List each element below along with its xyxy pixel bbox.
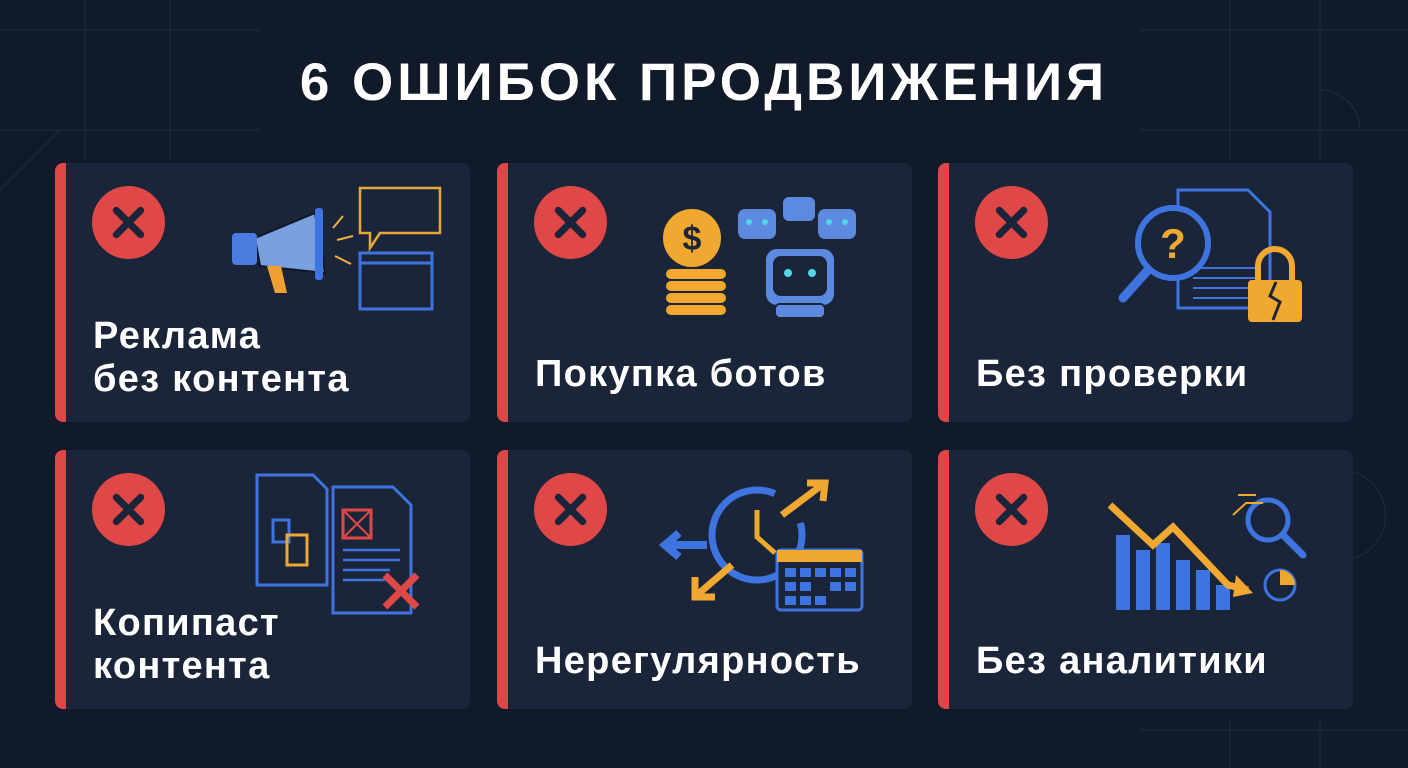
- icon: megaphone: [232, 186, 442, 310]
- text: Нерегулярность: [535, 640, 861, 682]
- panel: bots: [497, 163, 912, 422]
- text: [93, 602, 280, 687]
- icon: error x: [975, 186, 1048, 259]
- icon: clock arrows calendar: [659, 480, 864, 612]
- text: без контента: [93, 358, 350, 400]
- icon: coins and robots: $: [683, 220, 702, 258]
- panel: copy-paste: [55, 450, 470, 709]
- text: Копипаст: [93, 602, 280, 644]
- icon: magnifier document lock: ?: [1160, 220, 1186, 267]
- title: 6 ОШИБОК ПРОДВИЖЕНИЯ: [300, 53, 1108, 112]
- panel: irregularity: [497, 450, 912, 709]
- icon: error x: [92, 186, 165, 259]
- icon: falling chart: [1108, 494, 1306, 610]
- text: Без аналитики: [976, 640, 1268, 682]
- icon: error x: [92, 473, 165, 546]
- text: Без проверки: [976, 353, 1248, 395]
- icon: error x: [534, 473, 607, 546]
- panel: no analytics: [938, 450, 1353, 709]
- icon: copied documents: [256, 474, 420, 614]
- text: Покупка ботов: [535, 353, 827, 395]
- text: [93, 315, 350, 400]
- text: Реклама: [93, 315, 261, 357]
- icon: coins and robots: [663, 197, 856, 317]
- panel: no check: [938, 163, 1353, 422]
- text: контента: [93, 645, 271, 687]
- icon: magnifier document lock: [1118, 188, 1302, 322]
- panel: ads without content: [55, 163, 470, 422]
- icon: error x: [534, 186, 607, 259]
- icon: error x: [975, 473, 1048, 546]
